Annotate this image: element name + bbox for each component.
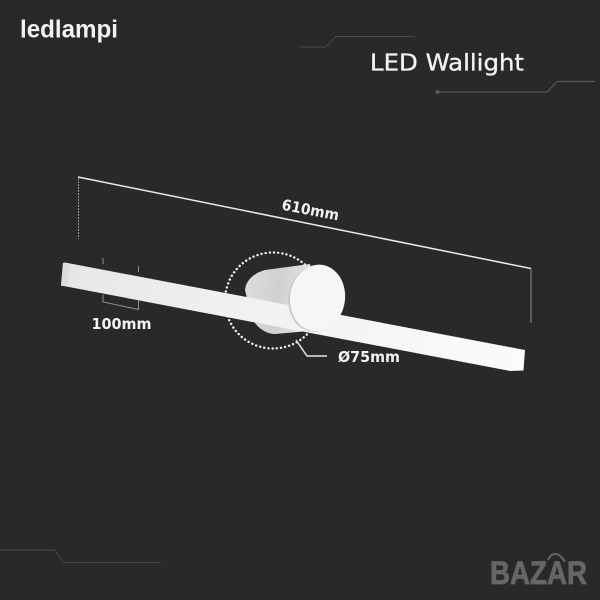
decorative circuit line: right — [436, 82, 595, 94]
dimension line: 610mm — [78, 177, 531, 323]
label: 610mm: 610mm — [280, 196, 341, 224]
brand logo: ledlampi — [20, 16, 118, 44]
lamp bar — [61, 262, 525, 371]
lamp cylinder face — [284, 261, 349, 336]
leader line: diameter — [296, 340, 327, 356]
decorative circuit line: top — [300, 36, 415, 47]
bar end cap — [61, 263, 70, 286]
decorative circuit line: bottom left — [0, 550, 161, 562]
dotted diameter circle — [225, 252, 321, 348]
lamp cylinder body — [245, 264, 320, 334]
dimension bracket: 100mm — [103, 258, 138, 310]
title: LED Wallight — [370, 50, 524, 76]
label: 75mm diameter: Ø75mm — [338, 348, 400, 366]
watermark: Bazar: BAZAR — [490, 555, 587, 591]
label: 100mm: 100mm — [92, 315, 152, 333]
